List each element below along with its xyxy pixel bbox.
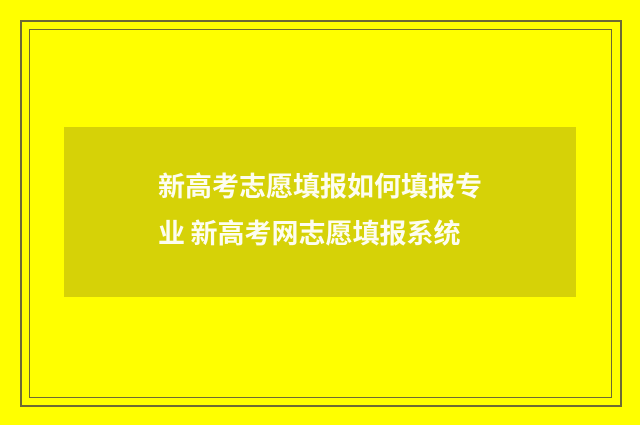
title panel	[64, 127, 576, 297]
title text: 新高考志愿填报如何填报专	[158, 172, 482, 202]
title text	[158, 172, 482, 249]
inner frame	[29, 29, 612, 398]
title text: 业 新高考网志愿填报系统	[158, 219, 461, 249]
